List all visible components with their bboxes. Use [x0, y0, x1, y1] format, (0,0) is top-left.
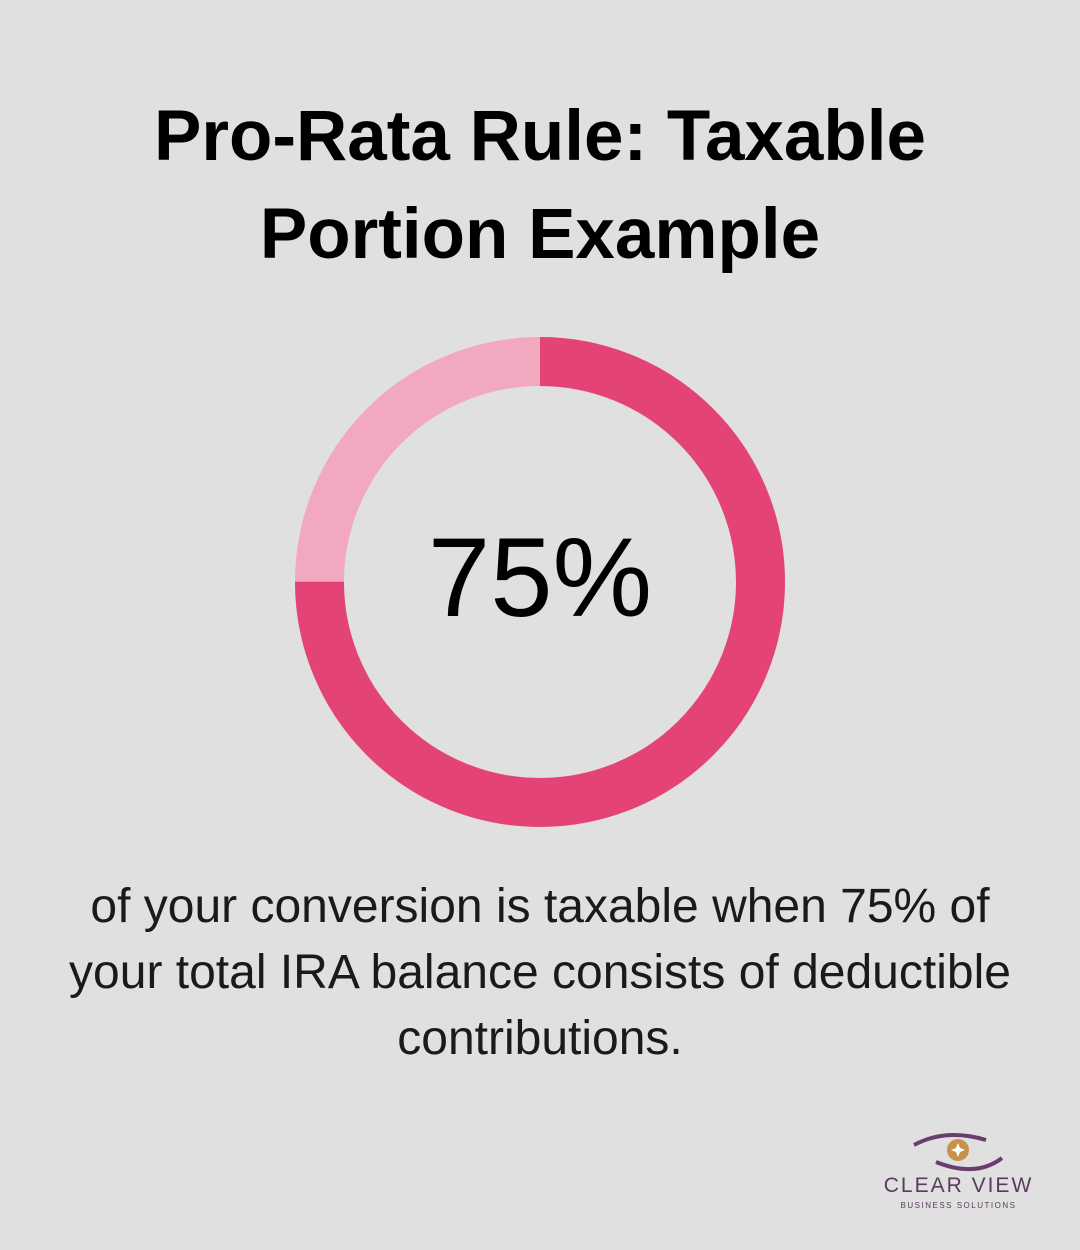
title: Portion Example [260, 195, 820, 274]
donut chart: 75% [428, 515, 652, 640]
logo [884, 1133, 1033, 1210]
body text: of your conversion is taxable when 75% of [90, 880, 990, 933]
body text: your total IRA balance consists of deductible [69, 946, 1011, 999]
body text [69, 880, 1011, 1065]
title [154, 97, 926, 274]
title: Pro-Rata Rule: Taxable [154, 97, 926, 176]
logo: BUSINESS SOLUTIONS [901, 1201, 1016, 1210]
logo: CLEAR VIEW [884, 1174, 1033, 1197]
body text: contributions. [397, 1012, 683, 1065]
